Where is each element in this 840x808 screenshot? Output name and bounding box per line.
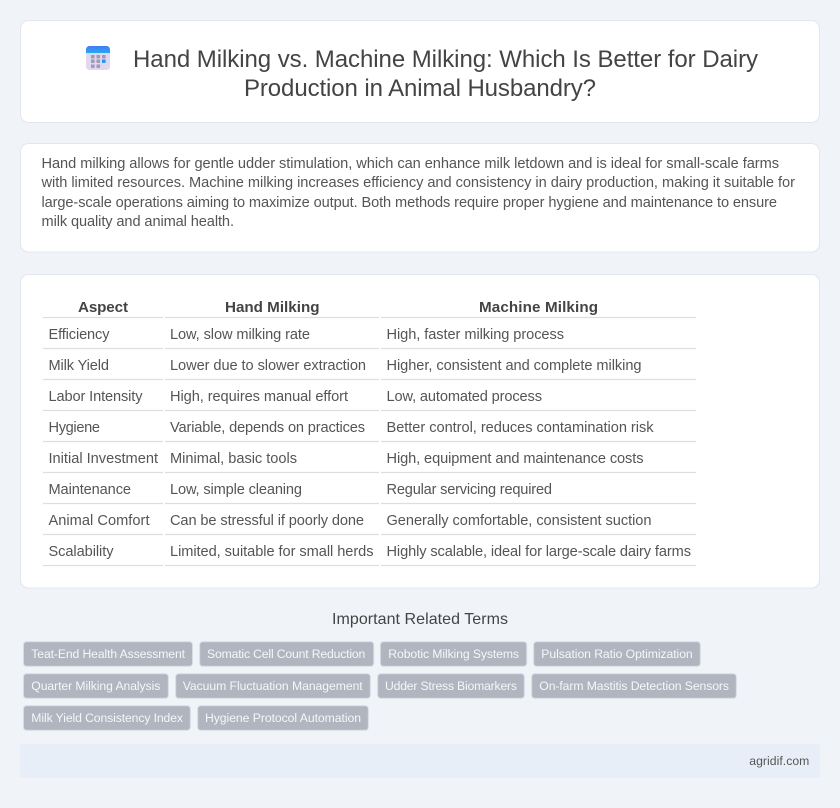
tag: [198, 706, 368, 730]
row: animal comfort: Can be stressful if poorly done: [170, 513, 364, 529]
tag: [24, 706, 190, 730]
footer: agridif.com: [749, 754, 809, 768]
tag: Robotic Milking Systems: [388, 647, 519, 661]
tag: Udder Stress Biomarkers: [385, 679, 517, 693]
title: Hand Milking vs. Machine Milking: Which Is Better for Dairy: [133, 46, 758, 73]
row: efficiency: Low, slow milking rate: [170, 327, 310, 343]
row: animal comfort: [48, 513, 652, 529]
tag: Somatic Cell Count Reduction: [207, 647, 365, 661]
title: [133, 46, 758, 102]
panel: comparison table: [20, 274, 820, 588]
tag: On-farm Mastitis Detection Sensors: [539, 679, 729, 693]
row: scalability: Highly scalable, ideal for large-scale dairy farms: [386, 544, 691, 560]
row: scalability: Scalability: [48, 544, 114, 560]
tag: [380, 642, 527, 666]
row: animal comfort: Animal Comfort: [48, 513, 150, 529]
row: initial investment: Initial Investment: [48, 451, 158, 467]
title: Production in Animal Husbandry?: [244, 75, 596, 102]
tag: Hygiene Protocol Automation: [205, 711, 361, 725]
row: milk yield: [48, 358, 642, 374]
tag: Pulsation Ratio Optimization: [541, 647, 693, 661]
row: hygiene: Variable, depends on practices: [170, 420, 365, 436]
row: milk yield: Higher, consistent and complete milking: [386, 358, 642, 374]
row: hygiene: Better control, reduces contamination risk: [386, 420, 654, 436]
row: maintenance: Low, simple cleaning: [170, 482, 302, 498]
panel: header: [20, 20, 820, 122]
related term tags: [24, 642, 736, 730]
heading: related terms: Important Related Terms: [332, 611, 508, 628]
text block: introduction: Hand milking allows for gentle udder stimulation, which can enhance milk letdown and is ideal for small-scale farms: [42, 156, 779, 172]
text block: introduction: milk quality and animal health.: [42, 214, 234, 230]
row: maintenance: Maintenance: [48, 482, 131, 498]
table header: Aspect: [78, 299, 128, 316]
panel: introduction: [20, 144, 820, 252]
tag: Teat-End Health Assessment: [31, 647, 186, 661]
row: efficiency: [48, 327, 564, 343]
table header: Machine Milking: [479, 299, 598, 316]
tag: [532, 674, 736, 698]
row: labor intensity: [48, 389, 542, 405]
row: initial investment: Minimal, basic tools: [170, 451, 297, 467]
tag: Vacuum Fluctuation Management: [183, 679, 363, 693]
row: maintenance: Regular servicing required: [386, 482, 552, 498]
row: animal comfort: Generally comfortable, consistent suction: [386, 513, 652, 529]
tag: [24, 674, 168, 698]
row: efficiency: High, faster milking process: [386, 327, 564, 343]
row: initial investment: [48, 451, 644, 467]
row: hygiene: [48, 420, 654, 436]
row: scalability: Limited, suitable for small herds: [170, 544, 374, 560]
tag: [200, 642, 374, 666]
table header: Hand Milking: [225, 299, 320, 316]
icon: calendar: [86, 46, 110, 70]
text block: introduction: large-scale operations aiming to maximize output. Both methods require proper hygiene and maintenance to ensure: [42, 195, 777, 211]
row: milk yield: Milk Yield: [48, 358, 109, 374]
tag: Milk Yield Consistency Index: [31, 711, 183, 725]
tag: Quarter Milking Analysis: [31, 679, 160, 693]
footer: [20, 744, 820, 778]
row: initial investment: High, equipment and maintenance costs: [386, 451, 644, 467]
tag: [24, 642, 192, 666]
row: labor intensity: Low, automated process: [386, 389, 542, 405]
row: milk yield: Lower due to slower extraction: [170, 358, 366, 374]
row: labor intensity: High, requires manual effort: [170, 389, 348, 405]
row: efficiency: Efficiency: [48, 327, 110, 343]
table header: [78, 299, 598, 316]
text block: introduction: with limited resources. Machine milking increases efficiency and consistency in dairy production, making it suitable for: [40, 175, 795, 191]
row: maintenance: [48, 482, 552, 498]
tag: [176, 674, 370, 698]
tag: [534, 642, 700, 666]
text block: introduction: [40, 156, 795, 230]
tag: [378, 674, 524, 698]
row: labor intensity: Labor Intensity: [48, 389, 143, 405]
row: hygiene: Hygiene: [48, 420, 100, 436]
row: scalability: [48, 544, 691, 560]
